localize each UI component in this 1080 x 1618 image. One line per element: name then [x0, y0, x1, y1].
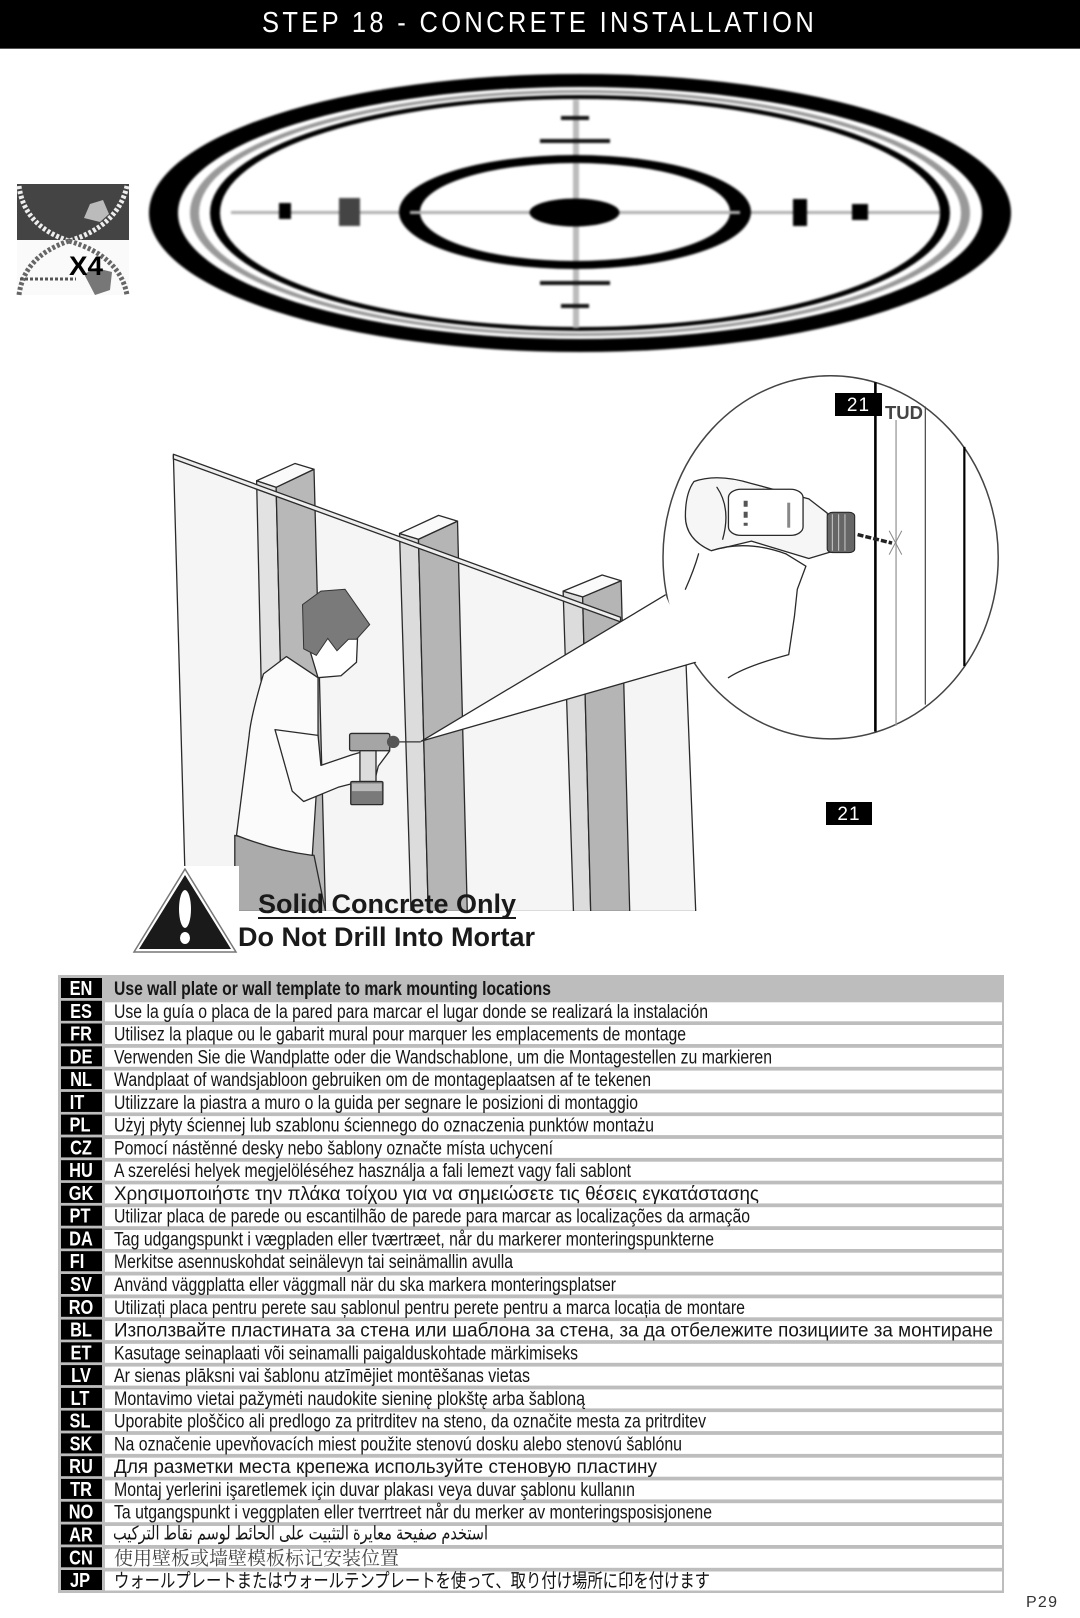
row AR: استخدم صفيحة معايرة التثبيت على الحائط لوسم نقاط التركيب [113, 1524, 488, 1544]
row FI: Merkitse asennuskohdat seinälevyn tai seinämallin avulla [114, 1252, 513, 1273]
part number 21 top [835, 393, 882, 416]
row NO: NO [69, 1500, 93, 1523]
row LT: Montavimo vietai pažymėti naudokite sieninę plokštę arba šabloną [114, 1389, 585, 1410]
icon: screw hardware x4: X4 [69, 251, 103, 281]
row IT: Utilizzare la piastra a muro o la guida per segnare le posizioni di montaggio [114, 1093, 638, 1114]
row FR: Utilisez la plaque ou le gabarit mural pour marquer les emplacements de montage [114, 1024, 686, 1046]
row NL [61, 1068, 1002, 1091]
row RO: RO [69, 1295, 93, 1318]
row SK [61, 1432, 1002, 1455]
row SV [61, 1272, 1002, 1296]
row LV [61, 1364, 1002, 1387]
row FI: FI [70, 1250, 84, 1273]
row PL: Użyj płyty ściennej lub szablonu ściennego do oznaczenia punktów montażu [114, 1116, 654, 1137]
row PL: PL [70, 1113, 90, 1136]
part number 21 bottom [826, 802, 872, 825]
row RU: Для разметки места крепежа используйте стеновую пластину [114, 1457, 657, 1478]
row HU: A szerelési helyek megjelöléséhez használja a fali lemezt vagy fali sablont [114, 1161, 632, 1182]
row NL: Wandplaat of wandsjabloon gebruiken om de montageplaatsen af te tekenen [114, 1070, 651, 1091]
installation illustration [173, 376, 998, 912]
row HU [61, 1159, 1002, 1182]
page number: P29 [1026, 1594, 1057, 1611]
row BL: Използвайте пластината за стена или шаблона за стена, за да отбележите позициите за монтиране [114, 1321, 993, 1342]
person [235, 589, 421, 912]
stud right [563, 575, 630, 912]
row HU: HU [69, 1159, 93, 1182]
row NO [61, 1500, 1002, 1524]
row SL: SL [70, 1409, 90, 1432]
warning text: Do Not Drill Into Mortar [238, 922, 535, 952]
row TR: TR [70, 1477, 92, 1500]
row ET [61, 1341, 1002, 1364]
warning area mask [128, 866, 1039, 961]
row EN: EN [70, 976, 92, 999]
row AR [61, 1523, 1002, 1546]
row CZ: Pomocí nástěnné desky nebo šablony označte místa uchycení [114, 1138, 554, 1159]
row PT: Utilizar placa de parede ou escantilhão de parede para marcar as localizações da armação [114, 1207, 750, 1228]
row DE: DE [70, 1045, 92, 1068]
row CZ [61, 1136, 1002, 1159]
row EN: Use wall plate or wall template to mark mounting locations [114, 979, 551, 1000]
part number 21 top: 21 [847, 395, 870, 416]
wall plate line [173, 454, 621, 622]
row JP: ウォールプレートまたはウォールテンプレートを使って、取り付け場所に印を付けます [114, 1566, 710, 1593]
row SL [61, 1409, 1002, 1433]
row SV: Använd väggplatta eller väggmall när du ska markera monteringsplatser [114, 1275, 617, 1296]
row EN [61, 976, 551, 1000]
row DA [61, 1227, 1002, 1250]
row DE: Verwenden Sie die Wandplatte oder die Wandschablone, um die Montagestellen zu markieren [114, 1047, 772, 1068]
row ET: ET [71, 1341, 91, 1364]
row ES: ES [70, 999, 92, 1022]
row LT: LT [71, 1386, 89, 1409]
part number 21 bottom: 21 [837, 804, 861, 825]
warning text [238, 889, 535, 952]
stud text: TUD [885, 403, 923, 423]
row FR: FR [70, 1022, 92, 1045]
callout cone [421, 595, 696, 741]
row LV: LV [71, 1364, 92, 1386]
row CZ: CZ [70, 1136, 92, 1159]
row LT [61, 1386, 1002, 1410]
row ET: Kasutage seinaplaati või seinamalli paigalduskohtade märkimiseks [114, 1343, 578, 1364]
magnifier circle [421, 376, 998, 741]
row GK [61, 1181, 1002, 1205]
row SL: Uporabite ploščico ali predlogo za pritrditev na steno, da označite mesta za pritrditev [114, 1412, 706, 1433]
row NL: NL [70, 1068, 92, 1090]
row ES: Use la guía o placa de la pared para marcar el lugar donde se realizará la instalación [114, 1002, 708, 1023]
row CN: CN [69, 1546, 93, 1569]
row TR: Montaj yerlerini işaretlemek için duvar plakası veya duvar şablonu kullanın [114, 1480, 635, 1501]
row ES [61, 999, 1002, 1023]
row CN: 使用壁板或墙壁模板标记安装位置 [114, 1543, 399, 1570]
icon: warning triangle [134, 869, 236, 952]
title banner [0, 0, 1080, 49]
row NO: Ta utgangspunkt i veggplaten eller tverrtreet når du merker av monteringsposisjonene [114, 1503, 712, 1524]
row FI [61, 1250, 1002, 1273]
icon: screw hardware x4 [17, 184, 129, 295]
row RO: Utilizați placa pentru perete sau șablonul pentru perete pentru a marca locația de montare [114, 1298, 745, 1319]
row RU [61, 1455, 1002, 1478]
row LV: Ar sienas plāksni vai šablonu atzīmējiet montēšanas vietas [114, 1366, 530, 1387]
row GK: GK [69, 1181, 94, 1204]
magnified drill [685, 478, 892, 558]
row DA: Tag udgangspunkt i vægpladen eller tværtræet, når du markerer monteringspunkterne [114, 1230, 714, 1250]
row PL [61, 1113, 1002, 1137]
row SK: Na označenie upevňovacích miest použite stenovú dosku alebo stenovú šablónu [114, 1434, 682, 1455]
row PT: PT [70, 1204, 90, 1227]
magnified hand [668, 546, 806, 678]
row GK: Χρησιμοποιήστε την πλάκα τοίχου για να σημειώσετε τις θέσεις εγκατάστασης [114, 1184, 759, 1205]
stud centre [400, 515, 467, 912]
row AR: AR [69, 1523, 93, 1546]
stud left [257, 463, 325, 912]
row IT [61, 1090, 1002, 1114]
row IT: IT [70, 1090, 84, 1113]
row TR [61, 1477, 1002, 1501]
warning text: Solid Concrete Only [258, 889, 516, 919]
title banner: STEP 18 - CONCRETE INSTALLATION [262, 5, 814, 38]
row FR [61, 1022, 1002, 1046]
row DA: DA [69, 1227, 93, 1250]
row CN [61, 1543, 1002, 1570]
row RU: RU [69, 1455, 93, 1478]
row SV: SV [70, 1272, 93, 1295]
wall template diagram [149, 74, 1011, 352]
row BL: BL [70, 1318, 92, 1341]
wall panel [173, 455, 696, 912]
row JP: JP [70, 1568, 90, 1591]
language instruction table [58, 975, 1004, 1593]
row SK: SK [70, 1432, 93, 1455]
